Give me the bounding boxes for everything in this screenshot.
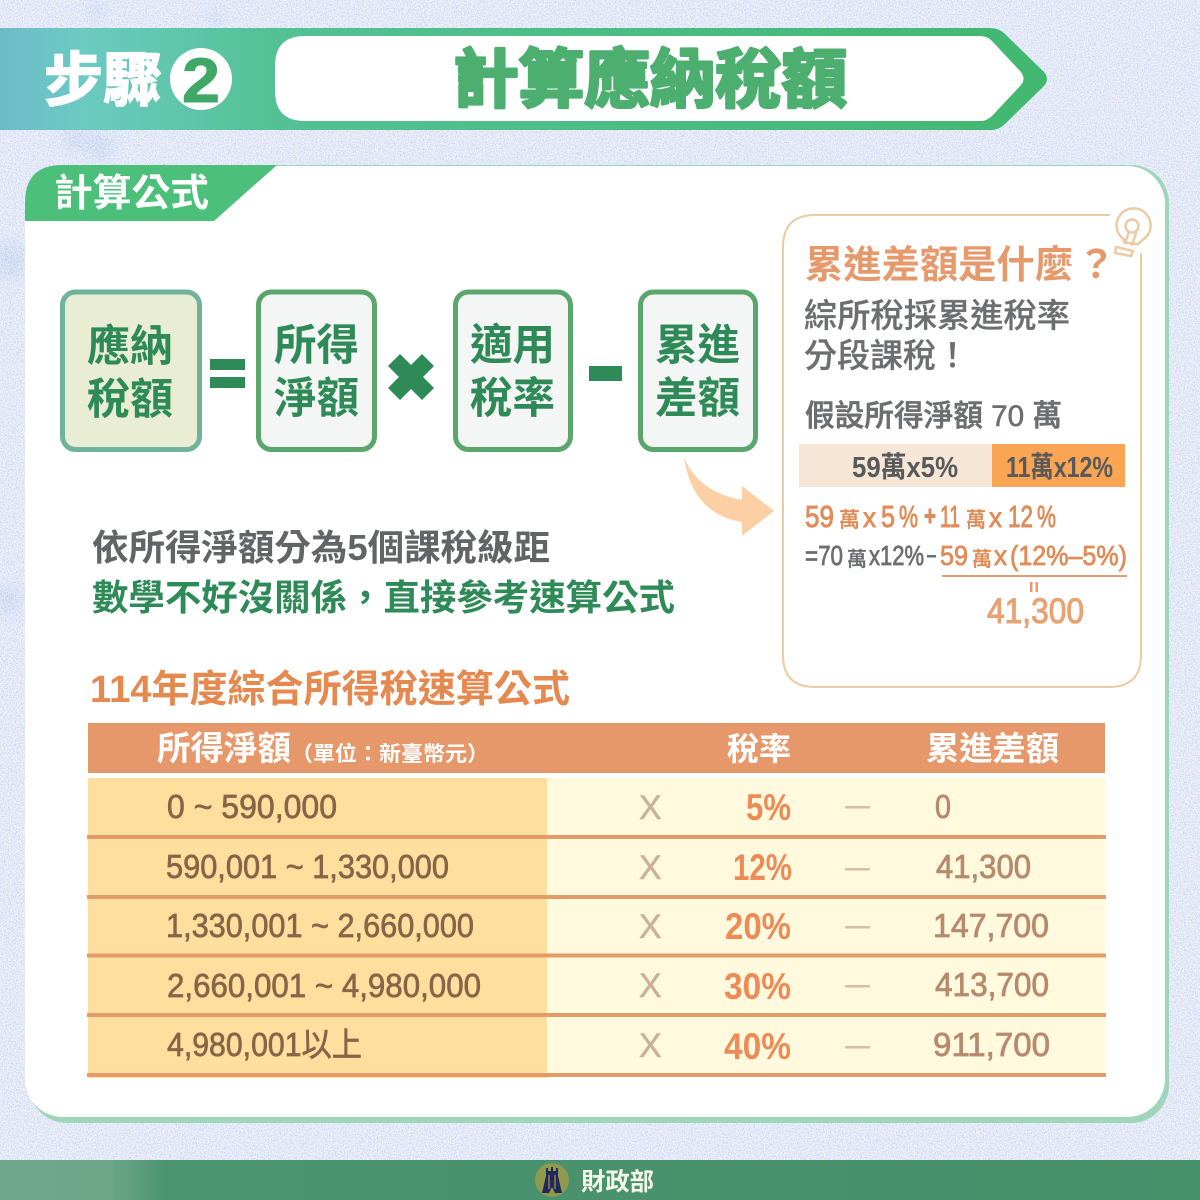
table header [88,723,1105,773]
table: quick tax formula [87,723,1106,1078]
multiply signs column: X [639,967,662,1005]
ministry name: 財政部 [581,1168,654,1196]
tax rate column [724,787,792,1067]
calculation line 2: 萬 [972,548,992,571]
income range column: 4,980,001以上 [167,1026,362,1063]
callout border [783,215,1141,687]
header banner [0,28,1047,130]
calculation line 2: (12%–5%) [1010,540,1127,571]
text block: tax brackets note: 依所得淨額分為5個課稅級距 [92,527,550,568]
example assumption: 假設所得淨額 70 萬 [805,400,1062,433]
segmented income bar [799,444,1125,487]
table heading: 114年度綜合所得稅速算公式 [90,669,570,711]
operator: minus [589,366,622,381]
calculation line 1: 11 [940,499,960,534]
tax rate column: 12% [733,847,792,888]
formula box: tax payable [62,292,200,450]
calculation line 1: 59 [805,499,834,534]
segmented income bar: 11萬x12% [1006,451,1113,484]
banner title plate [275,36,1024,121]
formula box: progressive difference: 差額 [655,375,740,423]
calculation line 1: x [989,502,1002,533]
calculation line 2: 59 [940,540,968,571]
table header: 累進差額 [926,730,1059,767]
icon: light bulb [1114,206,1153,256]
footer bar [0,1160,1200,1200]
calculation result: 41,300 [987,592,1084,631]
formula box: tax payable: 稅額 [87,376,173,424]
icon: ministry logo [535,1163,569,1197]
formula box: tax rate: 稅率 [470,375,555,423]
callout body: 分段課稅！ [804,337,969,374]
formula box: tax rate: 適用 [470,322,555,370]
formula box: net income [258,292,374,450]
tax rate column: 30% [724,966,791,1007]
callout title: ？ [1077,244,1116,287]
callout body [804,297,1070,374]
calculation line 1: 5 [881,499,895,534]
progressive difference column: 147,700 [933,907,1049,944]
calculation line 1 [805,499,1056,534]
main title: 計算應納稅額 [453,44,847,116]
progressive difference column [933,788,1050,1063]
multiply signs column: X [639,789,662,827]
callout body: 綜所稅採累進稅率 [804,297,1070,334]
multiply signs column: X [639,1027,662,1065]
table column fills [88,778,1105,1078]
multiply signs column: X [639,849,662,887]
step number badge: 2 [182,46,220,116]
progressive difference column: 41,300 [936,848,1031,885]
progressive difference column: 0 [935,788,951,825]
banner band [0,28,1047,130]
operator: equals [210,359,245,388]
text block: tax brackets note [92,527,675,618]
step label: 步驟 [44,48,162,114]
income range column [166,788,481,1063]
calculation line 2: x12% [869,540,924,571]
income range column: 1,330,001 ~ 2,660,000 [166,907,474,944]
calculation line 1: + [924,500,936,531]
calculation line 1: % [899,499,918,534]
tab: formula [25,165,277,221]
callout title: 累進差額是什麼 [805,244,1073,287]
step number badge [170,46,232,116]
calculation line 1: x [863,502,876,533]
calculation line 2 [805,540,1127,571]
minus signs column [845,806,870,1048]
panel: main card [25,165,1169,1123]
multiply signs column [639,789,662,1065]
formula box: progressive difference: 累進 [655,322,740,370]
underline and vertical equals [942,575,1127,592]
table header: （單位：新臺幣元） [291,742,489,766]
income range column: 590,001 ~ 1,330,000 [166,848,449,885]
table header: 稅率 [727,731,791,767]
text block: tax brackets note: 數學不好沒關係，直接參考速算公式 [92,577,675,618]
tax rate column: 40% [724,1026,791,1067]
income range column: 0 ~ 590,000 [167,788,337,825]
segmented income bar: 59萬x5% [852,451,958,484]
card shadow [29,165,1169,1123]
calculation line 2: =70 [805,540,843,571]
formula box: progressive difference [640,292,756,450]
formula box: net income: 淨額 [274,375,359,423]
progressive difference column: 413,700 [935,966,1049,1003]
calculation line 2: 萬 [847,548,867,571]
calculation line 1: 萬 [839,509,860,532]
formula box: tax rate [456,292,570,450]
table header: 所得淨額 [157,731,291,768]
calculation line 1: 萬 [966,509,986,532]
operator: multiply [394,360,428,394]
tab: formula: 計算公式 [54,173,209,215]
formula box: tax payable: 應納 [87,323,173,371]
tax rate column: 20% [725,906,791,947]
calculation line 2: x [994,540,1007,571]
multiply signs column: X [639,908,662,946]
table row rules [87,835,1106,1077]
tax rate column: 5% [746,787,791,828]
card surface [25,166,1165,1117]
progressive difference column: 911,700 [933,1026,1050,1063]
panel: callout progressive difference [783,206,1153,687]
calculation line 1: % [1037,499,1056,534]
calculation line 1: 12 [1008,499,1033,534]
arrow to callout [684,457,774,536]
formula box: net income: 所得 [274,322,359,370]
income range column: 2,660,001 ~ 4,980,000 [167,967,481,1004]
